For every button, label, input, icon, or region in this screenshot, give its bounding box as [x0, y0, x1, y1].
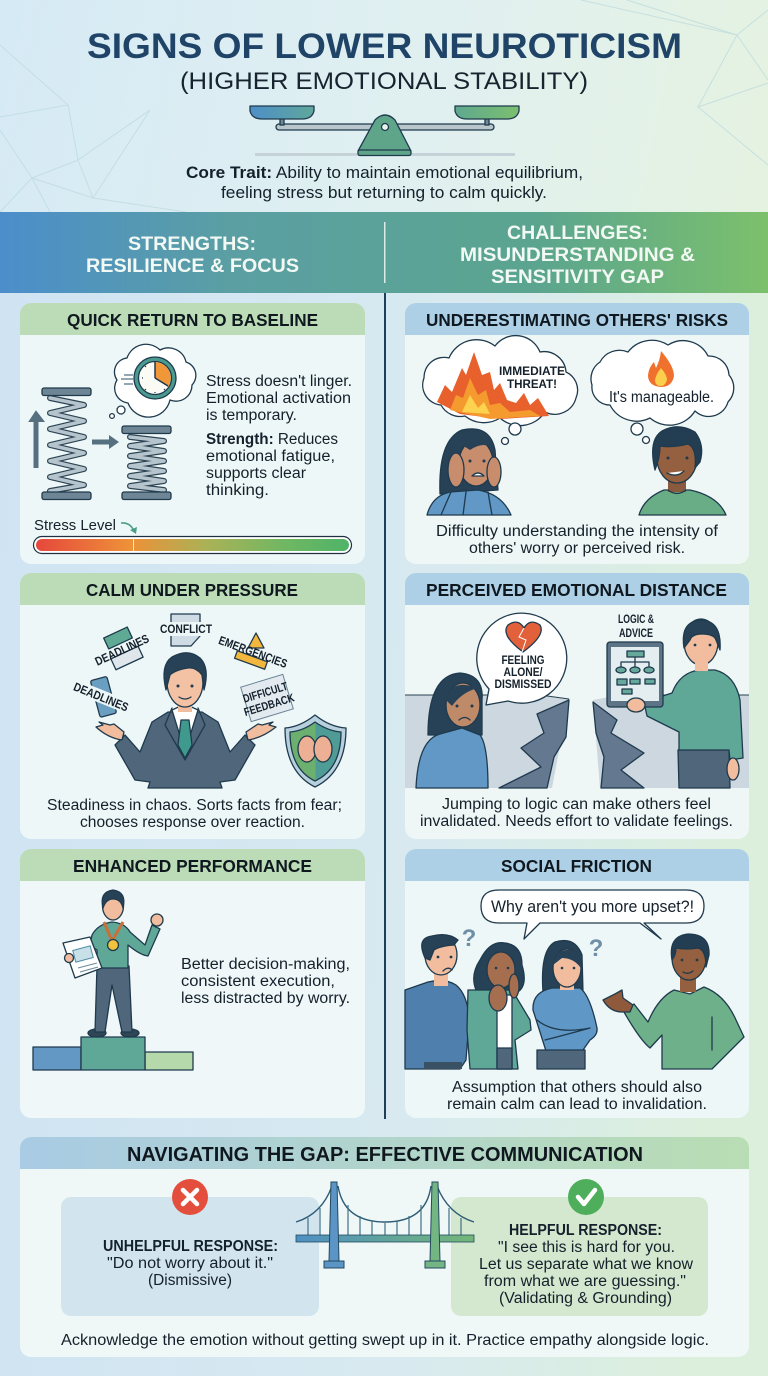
icon: springs	[30, 388, 171, 500]
text: description: Jumping to logic can make others feel	[442, 796, 711, 813]
icon: person with medal	[63, 890, 163, 1037]
label: difficult feedback: DIFFICULT	[242, 681, 289, 706]
icon: businessman	[96, 653, 276, 788]
heading: UNDERESTIMATING OTHERS' RISKS	[426, 310, 728, 330]
speech bubble: feeling alone: FEELING	[502, 655, 545, 667]
icon: podium	[33, 1037, 193, 1070]
icon: thought bubble with clock	[110, 344, 196, 418]
icon: man with tablet: LOGIC &	[618, 614, 654, 626]
callout: helpful response: Let us separate what we know	[479, 1256, 694, 1273]
heading: challenges: SENSITIVITY GAP	[491, 266, 664, 288]
text: description: Steadiness in chaos. Sorts facts from fear;	[47, 797, 342, 814]
speech bubble	[481, 890, 704, 939]
label: emergencies: EMERGENCIES	[217, 633, 289, 671]
label: conflict: CONFLICT	[160, 622, 213, 636]
title: SIGNS OF LOWER NEUROTICISM	[87, 26, 682, 66]
text: description: is temporary.	[206, 407, 297, 424]
chart: stress level bar	[34, 518, 352, 554]
callout: unhelpful response: (Dismissive)	[148, 1272, 232, 1289]
text: description: remain calm can lead to invalidation.	[447, 1096, 707, 1113]
text: takeaway: Acknowledge the emotion without getting swept up in it. Practice empathy alongside logic.	[61, 1332, 709, 1349]
text: description	[181, 956, 350, 1007]
speech bubble: feeling alone: ALONE/	[504, 667, 543, 679]
icon: calm thought cloud: It's manageable.	[609, 389, 714, 406]
callout: helpful response: (Validating & Grounding)	[499, 1290, 672, 1307]
subtitle: (HIGHER EMOTIONAL STABILITY)	[180, 68, 588, 95]
text: description: emotional fatigue,	[206, 448, 335, 465]
label: deadlines phone: DEADLINES	[71, 680, 131, 714]
heading: strengths: RESILIENCE & FOCUS	[86, 255, 299, 277]
icon: anxious woman	[467, 943, 531, 1069]
text: description: invalidated. Needs effort to validate feelings.	[420, 813, 733, 830]
icon: man gesturing	[603, 934, 744, 1069]
text: description	[436, 523, 719, 557]
label: deadlines calendar: DEADLINES	[93, 631, 151, 669]
core trait text: Core Trait: Ability to maintain emotional equilibrium,	[186, 163, 583, 182]
icon: question marks: ?	[589, 935, 603, 962]
heading: ENHANCED PERFORMANCE	[73, 856, 312, 876]
text: description	[420, 796, 733, 830]
chart: stress level bar: Stress Level	[34, 518, 116, 534]
text: description	[447, 1079, 707, 1113]
panel: perceived emotional distance	[405, 573, 749, 839]
heading: NAVIGATING THE GAP: EFFECTIVE COMMUNICATION	[127, 1143, 643, 1166]
heading: PERCEIVED EMOTIONAL DISTANCE	[426, 580, 727, 600]
callout: unhelpful response	[61, 1197, 319, 1316]
panel: enhanced performance	[20, 849, 365, 1118]
heading: strengths	[86, 233, 299, 277]
heading: challenges	[460, 222, 695, 288]
core trait text: feeling stress but returning to calm quickly.	[221, 183, 547, 202]
heading: SOCIAL FRICTION	[501, 856, 652, 876]
speech bubble: feeling alone: DISMISSED	[494, 679, 552, 691]
icon: shield with brain	[285, 715, 346, 787]
icon: calm man	[639, 427, 726, 515]
callout: helpful response: from what we are guessing."	[484, 1273, 686, 1290]
heading: CALM UNDER PRESSURE	[86, 580, 298, 600]
text: description: Emotional activation	[206, 390, 351, 407]
text: description: others' worry or perceived risk.	[469, 540, 685, 557]
panel: quick return to baseline	[20, 303, 365, 564]
speech bubble: Why aren't you more upset?!	[491, 897, 694, 916]
text: description: supports clear	[206, 465, 306, 482]
icon: question marks	[462, 925, 603, 962]
text: description: chooses response over reaction.	[80, 814, 305, 831]
panel: social friction	[405, 849, 749, 1118]
illustration: chasm	[405, 695, 749, 788]
section band	[0, 212, 768, 293]
icon: man with tablet: ADVICE	[619, 628, 653, 640]
text: description	[47, 797, 342, 831]
text: description: consistent execution,	[181, 973, 335, 990]
label: difficult feedback: FEEDBACK	[243, 692, 296, 719]
icon: worried thought cloud: THREAT!	[507, 377, 557, 391]
callout: helpful response: HELPFUL RESPONSE:	[509, 1222, 662, 1239]
heading: QUICK RETURN TO BASELINE	[67, 310, 318, 330]
icon: calm thought cloud	[591, 340, 734, 444]
label: conflict	[158, 614, 213, 646]
icon: red cross	[172, 1179, 208, 1215]
panel: navigating the gap	[20, 1137, 749, 1357]
icon: crossed-arms woman	[533, 941, 597, 1069]
text: description: Better decision-making,	[181, 956, 350, 973]
icon: confused man	[405, 935, 469, 1069]
text: description: Strength: Reduces	[206, 431, 338, 448]
text: description	[206, 373, 352, 499]
icon: question marks: ?	[462, 925, 476, 952]
icon: man with tablet	[607, 614, 743, 788]
icon: green check	[568, 1179, 604, 1215]
text: description: Stress doesn't linger.	[206, 373, 352, 390]
text: description: Difficulty understanding the intensity of	[436, 523, 719, 540]
callout: unhelpful response: "Do not worry about it."	[107, 1255, 273, 1272]
icon: worried woman	[427, 429, 511, 515]
icon: bridge	[296, 1182, 474, 1268]
label: difficult feedback	[237, 673, 298, 723]
core trait text	[186, 163, 583, 202]
callout: unhelpful response: UNHELPFUL RESPONSE:	[103, 1238, 278, 1255]
heading: challenges: MISUNDERSTANDING &	[460, 244, 695, 266]
icon: worried thought cloud	[423, 336, 578, 444]
text: description: thinking.	[206, 482, 269, 499]
heading: challenges: CHALLENGES:	[507, 222, 648, 244]
callout: helpful response: "I see this is hard for you.	[498, 1239, 675, 1256]
callout: helpful response	[451, 1197, 708, 1316]
text: description: less distracted by worry.	[181, 990, 350, 1007]
text: description: Assumption that others should also	[452, 1079, 702, 1096]
icon: balance scale	[250, 106, 519, 156]
speech bubble: feeling alone	[477, 613, 567, 705]
heading: strengths: STRENGTHS:	[128, 233, 256, 255]
panel: underestimating others' risks	[405, 303, 749, 564]
icon: worried thought cloud: IMMEDIATE	[499, 364, 565, 378]
icon: sad woman	[416, 673, 488, 788]
panel: calm under pressure	[20, 573, 365, 839]
